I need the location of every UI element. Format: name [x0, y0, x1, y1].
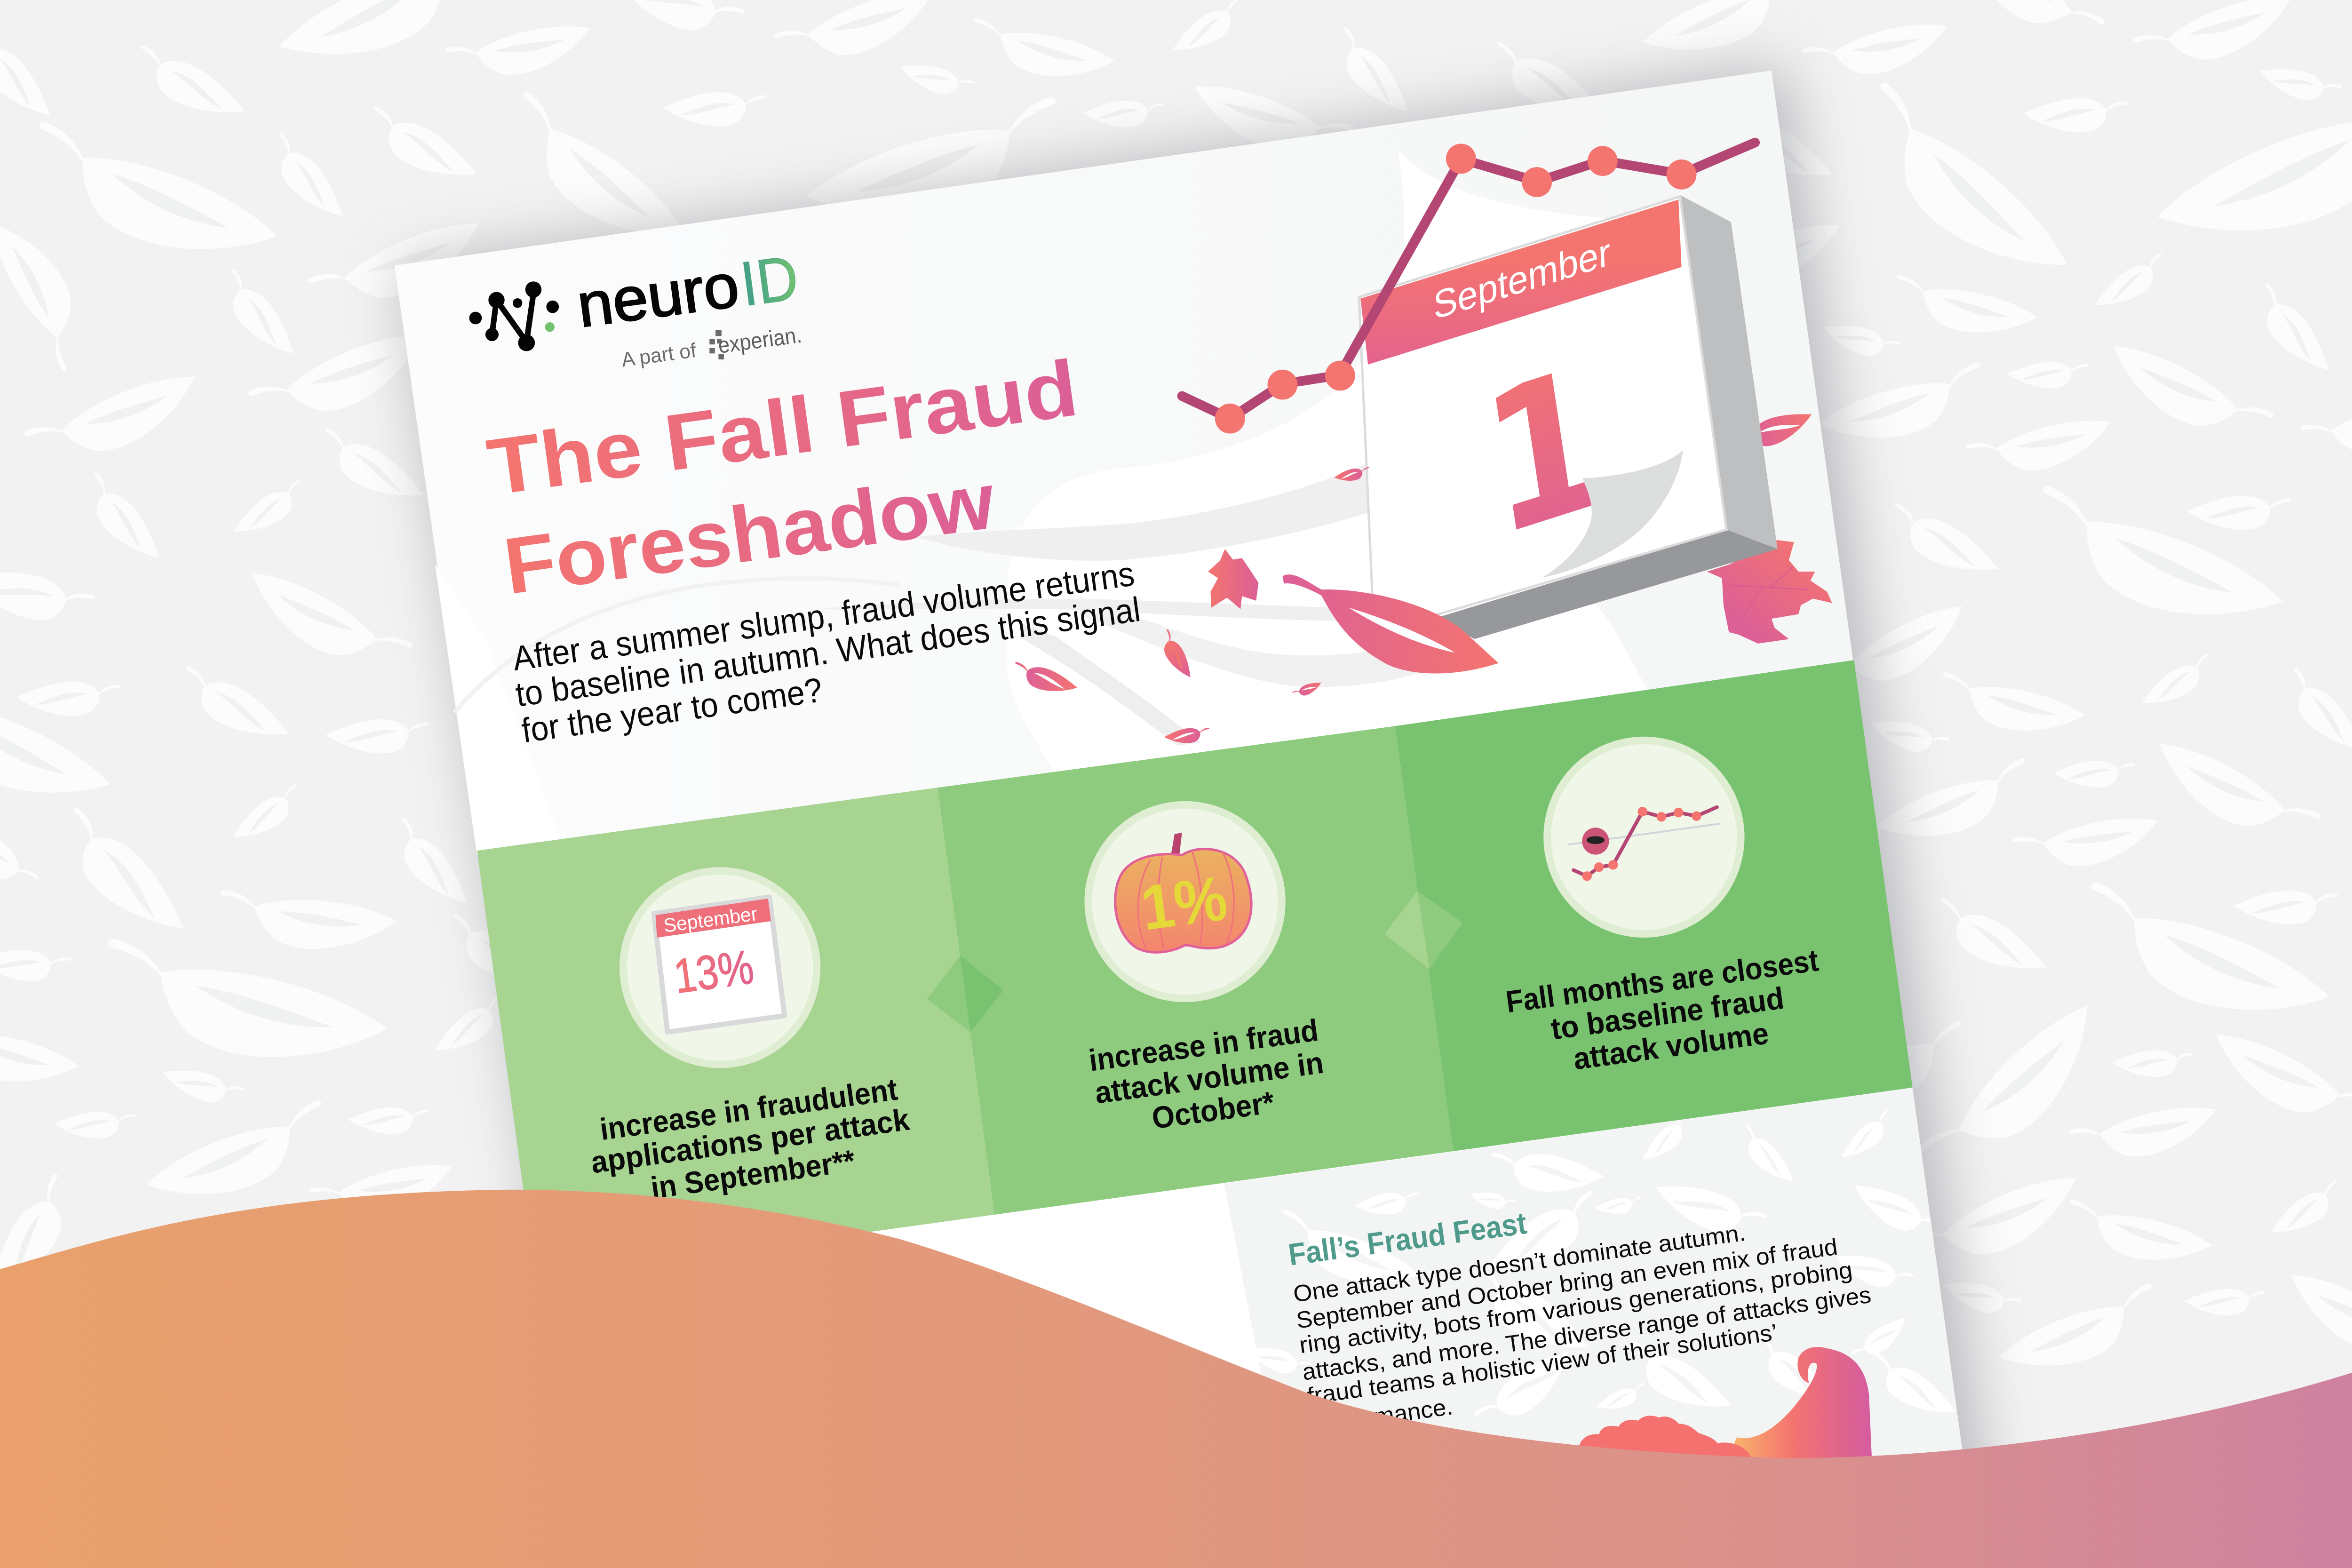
faint wind line [454, 578, 900, 713]
calendar side [1680, 195, 1778, 549]
calendar [1359, 195, 1778, 639]
maple leaf left [1208, 547, 1258, 609]
panel: Fall's Fraud Feast [1224, 1088, 1963, 1458]
baseline [1568, 824, 1721, 844]
stat three caption [1504, 943, 1820, 1076]
stat three caption: to baseline fraud [1549, 981, 1786, 1046]
white lower paper section [535, 1088, 1979, 1568]
stat three caption: Fall months are closest [1504, 943, 1820, 1019]
logo mark [469, 281, 559, 351]
falling pink leaves [1010, 466, 1499, 745]
mini line chart [1573, 807, 1717, 876]
badge [1543, 737, 1745, 938]
white corner wedge [435, 564, 564, 855]
panel body text: One attack type doesn’t dominate autumn. [1292, 1219, 1747, 1307]
small leaf [1154, 628, 1197, 682]
diamond one [927, 955, 1003, 1032]
mini calendar [654, 897, 785, 1032]
stat three caption: attack volume [1571, 1016, 1771, 1076]
stat one caption [589, 1072, 912, 1205]
subtitle: for the year to come? [519, 670, 825, 750]
title line one: The Fall Fraud [482, 343, 1083, 512]
wordmark neuro: neuro [573, 251, 743, 340]
calendar red header [1360, 199, 1682, 365]
panel background [1224, 1088, 1979, 1568]
a part of: A part of [620, 339, 698, 372]
cornucopia feathers [1578, 1416, 1754, 1463]
panel leaves [1256, 1110, 1955, 1416]
panel body text [1292, 1219, 1873, 1439]
white wind swirl behind calendar [1007, 150, 1665, 780]
pumpkin body [1115, 849, 1251, 952]
mini calendar month: September [662, 902, 759, 937]
small leaf [1010, 660, 1080, 699]
calendar page [1359, 197, 1726, 633]
pumpkin stem [1164, 833, 1185, 863]
wind band three [1080, 597, 1436, 687]
paper sheet [395, 71, 1979, 1568]
stat two caption: October* [1150, 1085, 1277, 1135]
diamond two [1384, 891, 1462, 969]
wordmark ID: ID [737, 243, 803, 319]
line chart on calendar [1182, 143, 1755, 434]
month label: September [1432, 229, 1612, 328]
stat two: pumpkin [1084, 801, 1286, 1002]
stat two caption [1087, 1013, 1326, 1135]
column three background [1395, 660, 1913, 1152]
panel body text: attacks, and more. The diverse range of attacks gives [1301, 1281, 1873, 1385]
badge [1084, 801, 1286, 1002]
stat three: baseline chart [1543, 737, 1745, 938]
paper base [395, 71, 1979, 1568]
panel body text: ring activity, bots from various generations, probing [1298, 1257, 1854, 1358]
stat two caption: increase in fraud [1087, 1013, 1320, 1078]
panel heading: Fall’s Fraud Feast [1286, 1206, 1529, 1272]
logo: neuroID, a part of Experian [469, 243, 803, 372]
panel body text: performance. [1310, 1393, 1454, 1439]
calendar bottom [1436, 530, 1778, 639]
1 percent: 1% [1137, 863, 1231, 944]
stat one caption: in September** [649, 1143, 857, 1205]
maple leaf behind calendar [1707, 540, 1832, 644]
column one background [477, 788, 994, 1278]
subtitle: to baseline in autumn. What does this signal [513, 590, 1143, 714]
title line two: Foreshadow [499, 456, 1000, 611]
paper drop shadow [402, 67, 1995, 1568]
stat one caption: increase in fraudulent [598, 1072, 899, 1146]
panel body text: September and October bring an even mix of fraud [1295, 1234, 1839, 1334]
falling leaf behind calendar [1733, 404, 1817, 457]
badge [620, 867, 820, 1068]
chart dots [1582, 807, 1701, 881]
13 percent: 13% [671, 940, 757, 1003]
hooded figure [1582, 828, 1609, 855]
experian wordmark: experian. [716, 323, 803, 358]
bottom gradient wave [0, 1190, 2352, 1568]
large pink leaf [1282, 574, 1499, 674]
small leaf [1292, 678, 1324, 700]
wind band two [815, 599, 1374, 621]
mini calendar header [655, 899, 771, 938]
panel body text: fraud teams a holistic view of their solutions’ [1306, 1319, 1779, 1409]
green stats band [477, 660, 1913, 1278]
experian dots [709, 330, 724, 359]
subtitle: After a summer slump, fraud volume returns [510, 554, 1136, 678]
stat one caption: applications per attack [589, 1102, 912, 1180]
cornucopia horn [1725, 1347, 1872, 1463]
wind band one [916, 459, 1377, 561]
stat two caption: attack volume in [1093, 1045, 1326, 1110]
wind band four [1020, 622, 1200, 746]
subtitle [510, 554, 1143, 750]
pumpkin ribs [1138, 852, 1234, 950]
stat one: September calendar [620, 867, 820, 1068]
page curl [1542, 450, 1683, 578]
title [482, 343, 1083, 611]
column two background [938, 726, 1454, 1215]
day number: 1 [1471, 324, 1618, 581]
small leaf [1333, 466, 1371, 484]
small leaf [1164, 726, 1210, 745]
